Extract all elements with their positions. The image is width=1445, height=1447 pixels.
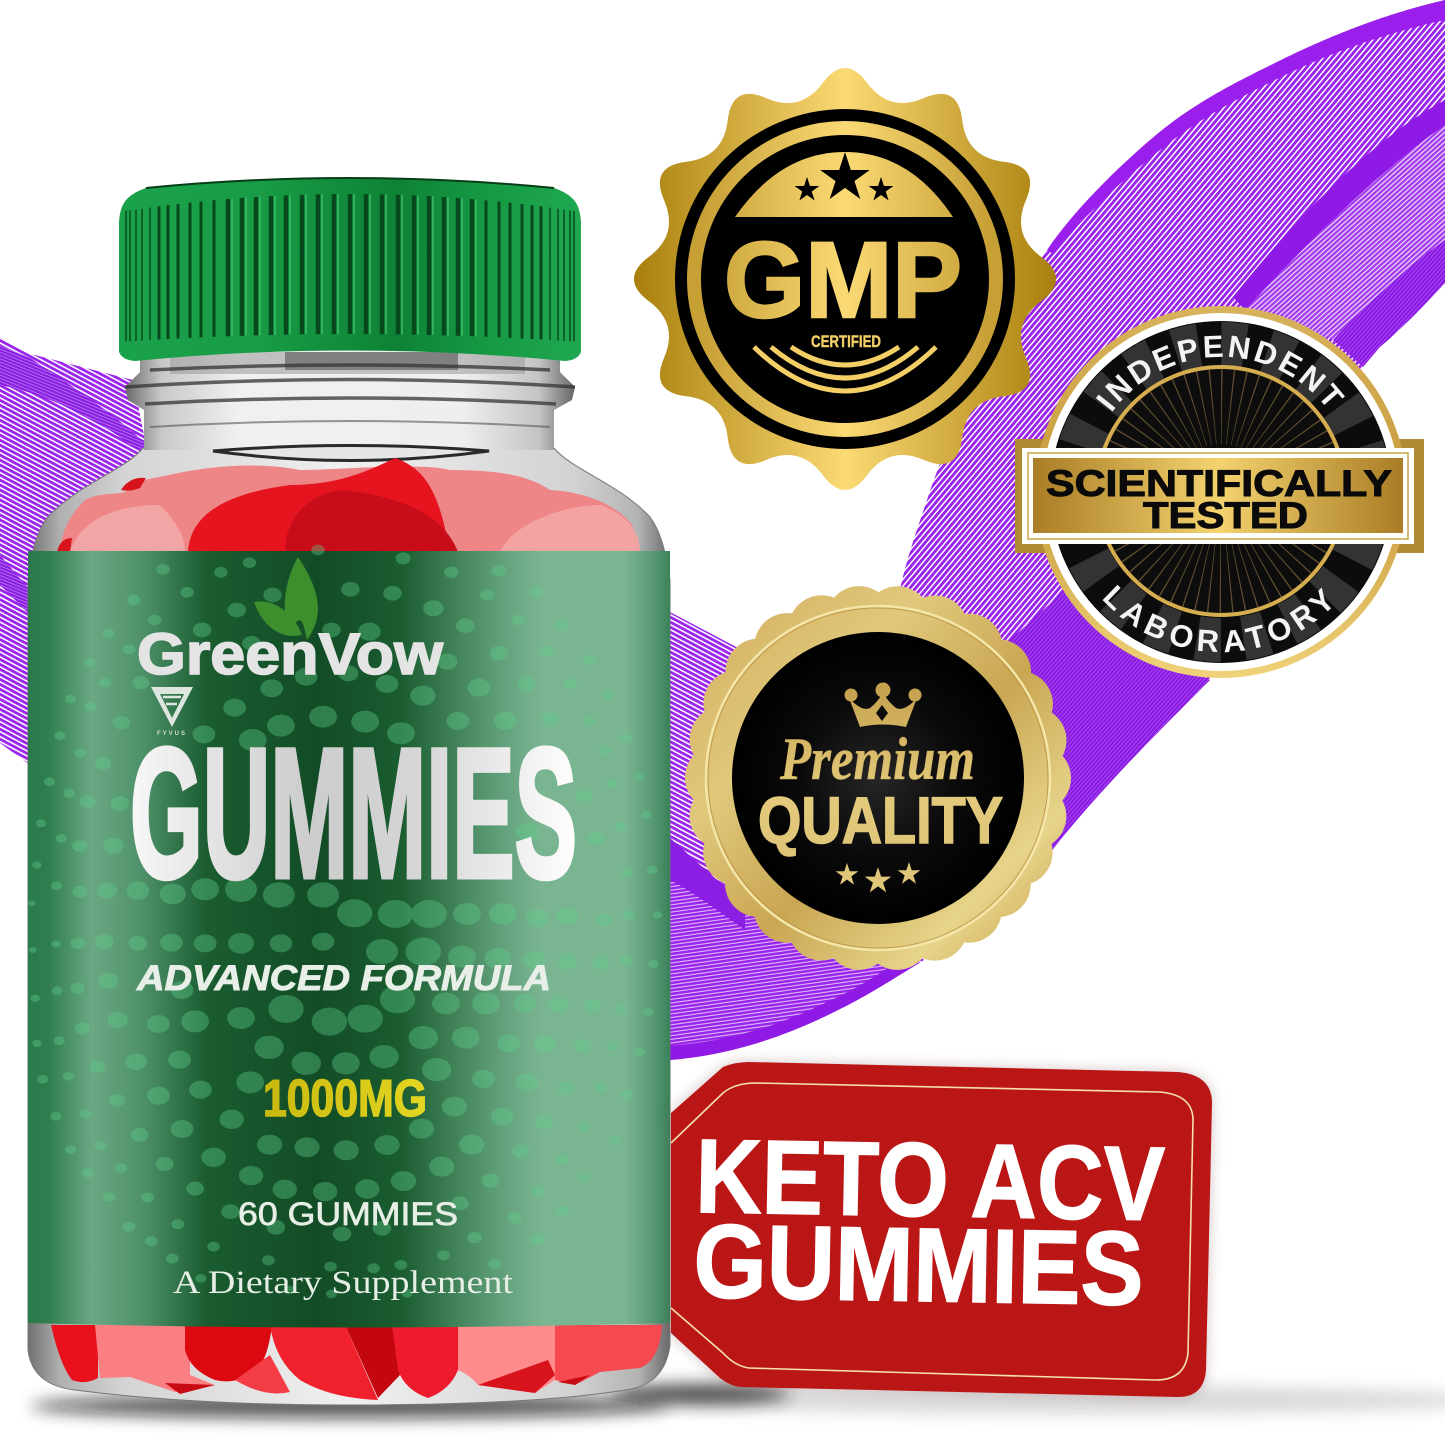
supplement note: A Dietary Supplement <box>173 1265 513 1301</box>
purple wave ribbon background <box>0 0 1445 1060</box>
badge: premium quality <box>694 594 1062 962</box>
curved label bottom: LABORATORY <box>1102 584 1331 652</box>
quality word: QUALITY <box>758 783 1003 857</box>
icon: FYVUS triangle logo: FYVUS <box>157 731 187 737</box>
upper band <box>860 0 1445 900</box>
three stars <box>836 862 920 892</box>
badge: GMP certified <box>634 68 1056 490</box>
certified label: CERTIFIED <box>811 332 881 351</box>
icon: crown <box>844 682 922 727</box>
script word: Premium <box>779 726 975 792</box>
label dot pattern lower <box>29 933 659 1298</box>
banner text line one: SCIENTIFICALLY <box>1046 463 1392 504</box>
subtitle: ADVANCED FORMULA <box>136 959 551 998</box>
curved label top: INDEPENDENT <box>1096 336 1345 412</box>
GMP lettering: GMP <box>724 219 962 340</box>
curved lines <box>754 347 936 391</box>
lower left band <box>0 337 1020 963</box>
dome with stars <box>735 152 953 217</box>
icon: brand leaves <box>254 557 318 640</box>
floor shadows <box>30 1384 1445 1418</box>
lower moire band <box>670 870 925 1060</box>
product bottle <box>28 178 670 1405</box>
tag text line one: KETO ACV <box>695 1118 1166 1243</box>
gold banner <box>1022 448 1414 544</box>
product name: GUMMIES <box>130 711 577 917</box>
label dot pattern upper <box>28 545 662 928</box>
count: 60 GUMMIES <box>238 1196 458 1232</box>
green screw cap <box>119 178 581 361</box>
icon: FYVUS triangle logo <box>151 687 193 737</box>
gummies at bottom of jar <box>51 1325 662 1400</box>
glass jar <box>28 350 670 1405</box>
dosage: 1000MG <box>263 1070 427 1128</box>
banner text line two: TESTED <box>1143 495 1308 536</box>
product label <box>28 545 670 1328</box>
tag text line two: GUMMIES <box>693 1203 1145 1328</box>
gummies inside top of jar <box>57 458 640 552</box>
brand name: GreenVow <box>137 622 444 687</box>
red tag callout <box>671 1062 1212 1397</box>
badge: scientifically tested laboratory <box>1015 306 1424 678</box>
